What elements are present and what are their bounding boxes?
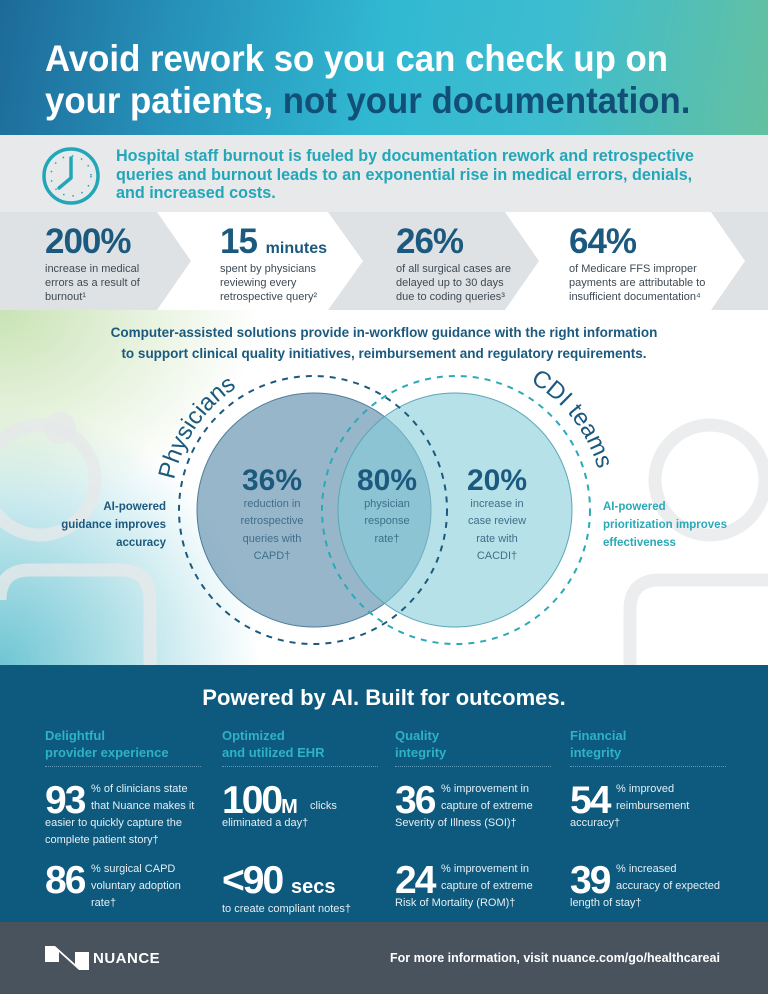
venn diagram: accuracy [116,537,167,549]
title: Avoid rework so you can check up on [45,38,668,79]
venn diagram: increase in [470,498,524,510]
stat 4 [569,222,705,303]
venn diagram: CACDI† [477,550,517,562]
column: quality: % improvement in [441,863,529,875]
header [0,0,768,135]
venn diagram [61,371,727,645]
logo [45,946,160,970]
stat 4: of Medicare FFS improper [569,263,697,275]
venn diagram: response [364,515,410,527]
column: quality: 36 [395,779,434,822]
column: financial: % improved [616,783,674,795]
column: financial: 39 [570,859,609,902]
stat 4: insufficient documentation⁴ [569,291,701,303]
venn diagram: AI-powered [603,501,666,513]
stat 3 [396,222,511,303]
stat 2: retrospective query² [220,291,317,303]
column: quality: Severity of Illness (SOI)† [395,817,517,829]
column: EHR: clicks [310,800,337,812]
column: financial: length of stay† [570,897,642,909]
column: provider experience: 86 [45,859,84,902]
stat 1 [45,222,140,303]
stat 1: 200% [45,222,131,261]
chevron stats [0,212,768,310]
outcomes heading: Powered by AI. Built for outcomes. [202,685,566,710]
column: EHR: 100M [222,779,298,822]
stat 3: delayed up to 30 days [396,277,504,289]
column: financial: accuracy† [570,817,620,829]
logo: NUANCE [93,950,160,967]
column: provider experience: 93 [45,779,84,822]
intro text: Hospital staff burnout is fueled by documentation rework and retrospective [116,146,694,165]
stat 3: 26% [396,222,463,261]
column: provider experience: % of clinicians state [91,783,188,795]
venn diagram: queries with [243,533,301,545]
venn section [0,310,768,665]
venn diagram: 80% [357,464,417,497]
stat 4: payments are attributable to [569,277,705,289]
venn diagram: rate† [374,533,400,545]
intro text: and increased costs. [116,183,276,202]
column: EHR [222,728,378,915]
outcomes section [0,665,768,922]
venn diagram: guidance improves [61,519,166,531]
column: financial: 54 [570,779,609,822]
venn subtitle: to support clinical quality initiatives, reimbursement and regulatory requirements. [121,346,647,361]
column: quality: 24 [395,859,434,902]
venn diagram: CAPD† [254,550,290,562]
stat 1: burnout¹ [45,291,86,303]
column: EHR: and utilized EHR [222,745,325,760]
venn diagram: retrospective [241,515,303,527]
venn diagram: physician [364,498,410,510]
title [45,38,690,121]
venn diagram: AI-powered [103,501,166,513]
column: provider experience [45,728,201,909]
column: provider experience: easier to quickly capture the [45,817,182,829]
title: your patients, not your documentation. [45,80,690,121]
stat 4: 64% [569,222,636,261]
stat 2: 15 minutes [220,222,327,261]
column: provider experience: that Nuance makes it [91,800,194,812]
column: financial [570,728,726,909]
venn diagram: prioritization improves [603,519,727,531]
column: EHR: eliminated a day† [222,817,308,829]
intro text: queries and burnout leads to an exponential rise in medical errors, denials, [116,164,692,184]
column: provider experience: complete patient story† [45,834,159,846]
intro text [116,146,694,202]
venn diagram: CDI teams [534,371,609,468]
venn subtitle: Computer-assisted solutions provide in-workflow guidance with the right information [111,325,657,340]
venn diagram: rate with [476,533,518,545]
venn subtitle [111,325,657,361]
intro band [0,135,768,213]
stat 3: due to coding queries³ [396,291,505,303]
column: quality [395,728,551,909]
column: quality: capture of extreme [441,800,533,812]
column: EHR: to create compliant notes† [222,903,351,915]
footer link: For more information, visit nuance.com/go/healthcareai [390,951,720,965]
column: quality: Quality [395,728,439,743]
column: quality: % improvement in [441,783,529,795]
icon: clock [42,147,100,205]
decorative silhouettes [0,412,768,665]
stat 2: reviewing every [220,277,296,289]
column: financial: integrity [570,745,621,760]
column: provider experience: % surgical CAPD [91,863,175,875]
column: financial: reimbursement [616,800,689,812]
column: financial: % increased [616,863,677,875]
venn diagram: reduction in [244,498,300,510]
venn diagram: effectiveness [603,537,676,549]
column: quality: integrity [395,745,446,760]
column: financial: Financial [570,728,626,743]
footer [0,922,768,994]
stat 1: errors as a result of [45,277,140,289]
venn diagram: 36% [242,464,302,497]
column: quality: capture of extreme [441,880,533,892]
column: financial: accuracy of expected [616,880,720,892]
venn diagram: case review [468,515,526,527]
column: quality: Risk of Mortality (ROM)† [395,897,515,909]
venn diagram: 20% [467,464,527,497]
column: EHR: Optimized [222,728,285,743]
column: provider experience: provider experience [45,745,169,760]
stat 2: spent by physicians [220,263,316,275]
column: provider experience: Delightful [45,728,105,743]
column: provider experience: voluntary adoption rate† [91,880,181,909]
venn diagram: Physicians [158,379,235,478]
column: EHR: <90 secs [222,859,336,902]
stat 1: increase in medical [45,263,139,275]
stat 3: of all surgical cases are [396,263,511,275]
stat 2 [220,222,327,303]
